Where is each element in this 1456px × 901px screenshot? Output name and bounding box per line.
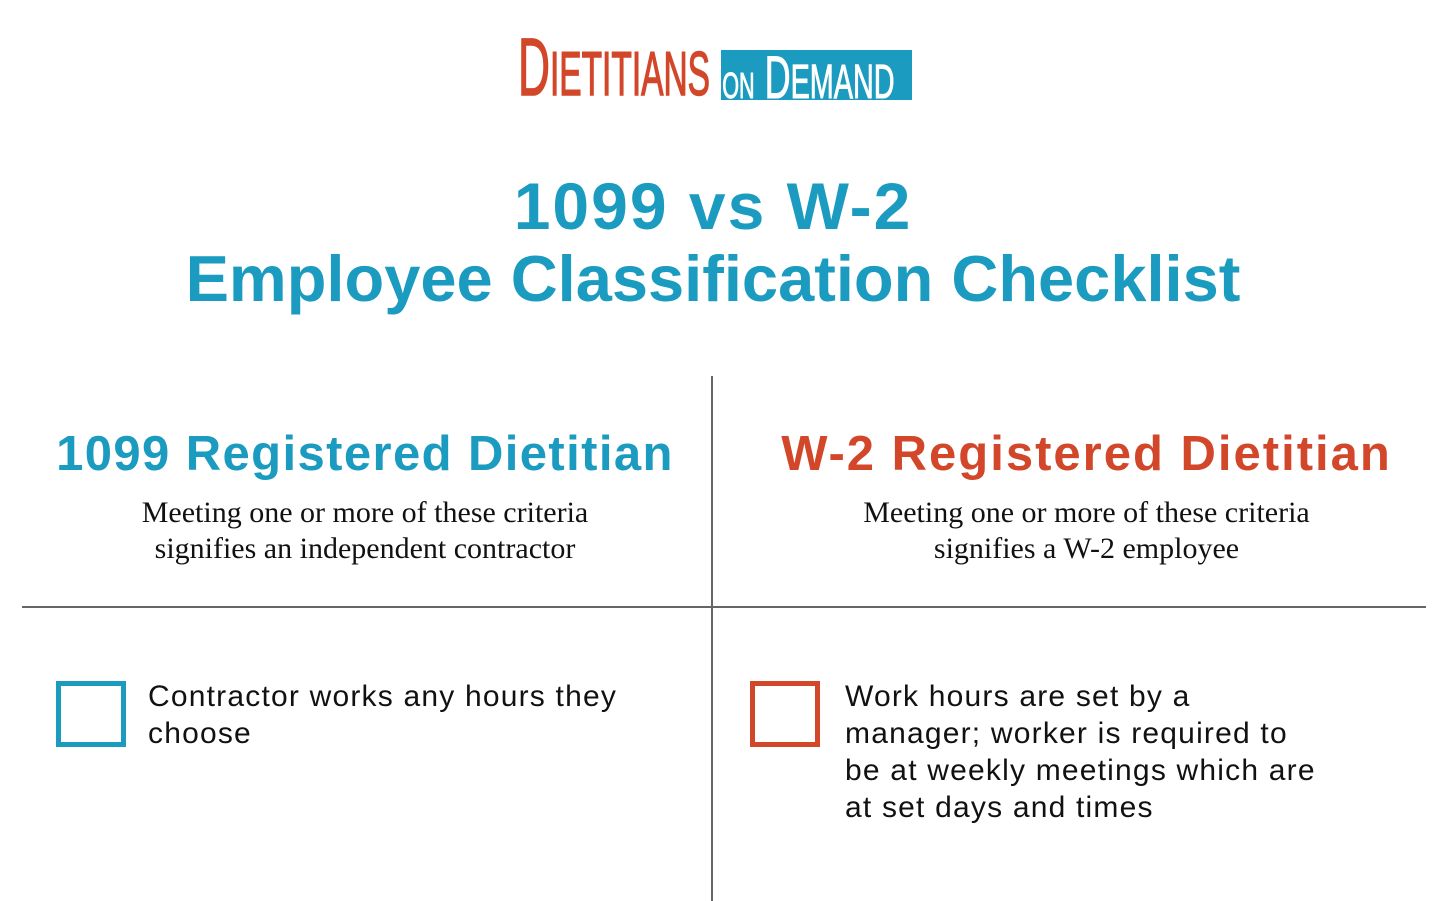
subtitle: 1099: Meeting one or more of these criteria — [142, 496, 588, 529]
subtitle: W-2: Meeting one or more of these criteria — [863, 496, 1310, 529]
logo text: Dietitians: DIETITIANS — [518, 22, 710, 113]
item: 1099: Contractor works any hours they choose — [148, 680, 617, 750]
horizontal divider — [22, 606, 1426, 608]
panel: 1099 — [56, 427, 674, 750]
title: Employee Classification Checklist — [186, 242, 1240, 315]
checkbox: 1099 — [56, 681, 126, 747]
heading: W-2: W-2 Registered Dietitian — [781, 427, 1392, 481]
panel: W-2 — [750, 427, 1392, 824]
vertical divider — [711, 376, 713, 901]
subtitle: W-2 — [863, 496, 1310, 565]
title — [186, 169, 1240, 315]
subtitle: 1099: signifies an independent contractor — [155, 532, 575, 565]
heading: 1099: 1099 Registered Dietitian — [56, 427, 674, 481]
title: 1099 vs W-2 — [514, 169, 912, 243]
logo — [518, 22, 912, 113]
subtitle: 1099 — [142, 496, 588, 565]
item: W-2: Work hours are set by a manager; worker is required to be at weekly meetings which are at set days and times — [845, 680, 1316, 824]
checkbox: W-2 — [750, 681, 820, 747]
subtitle: W-2: signifies a W-2 employee — [934, 532, 1239, 565]
